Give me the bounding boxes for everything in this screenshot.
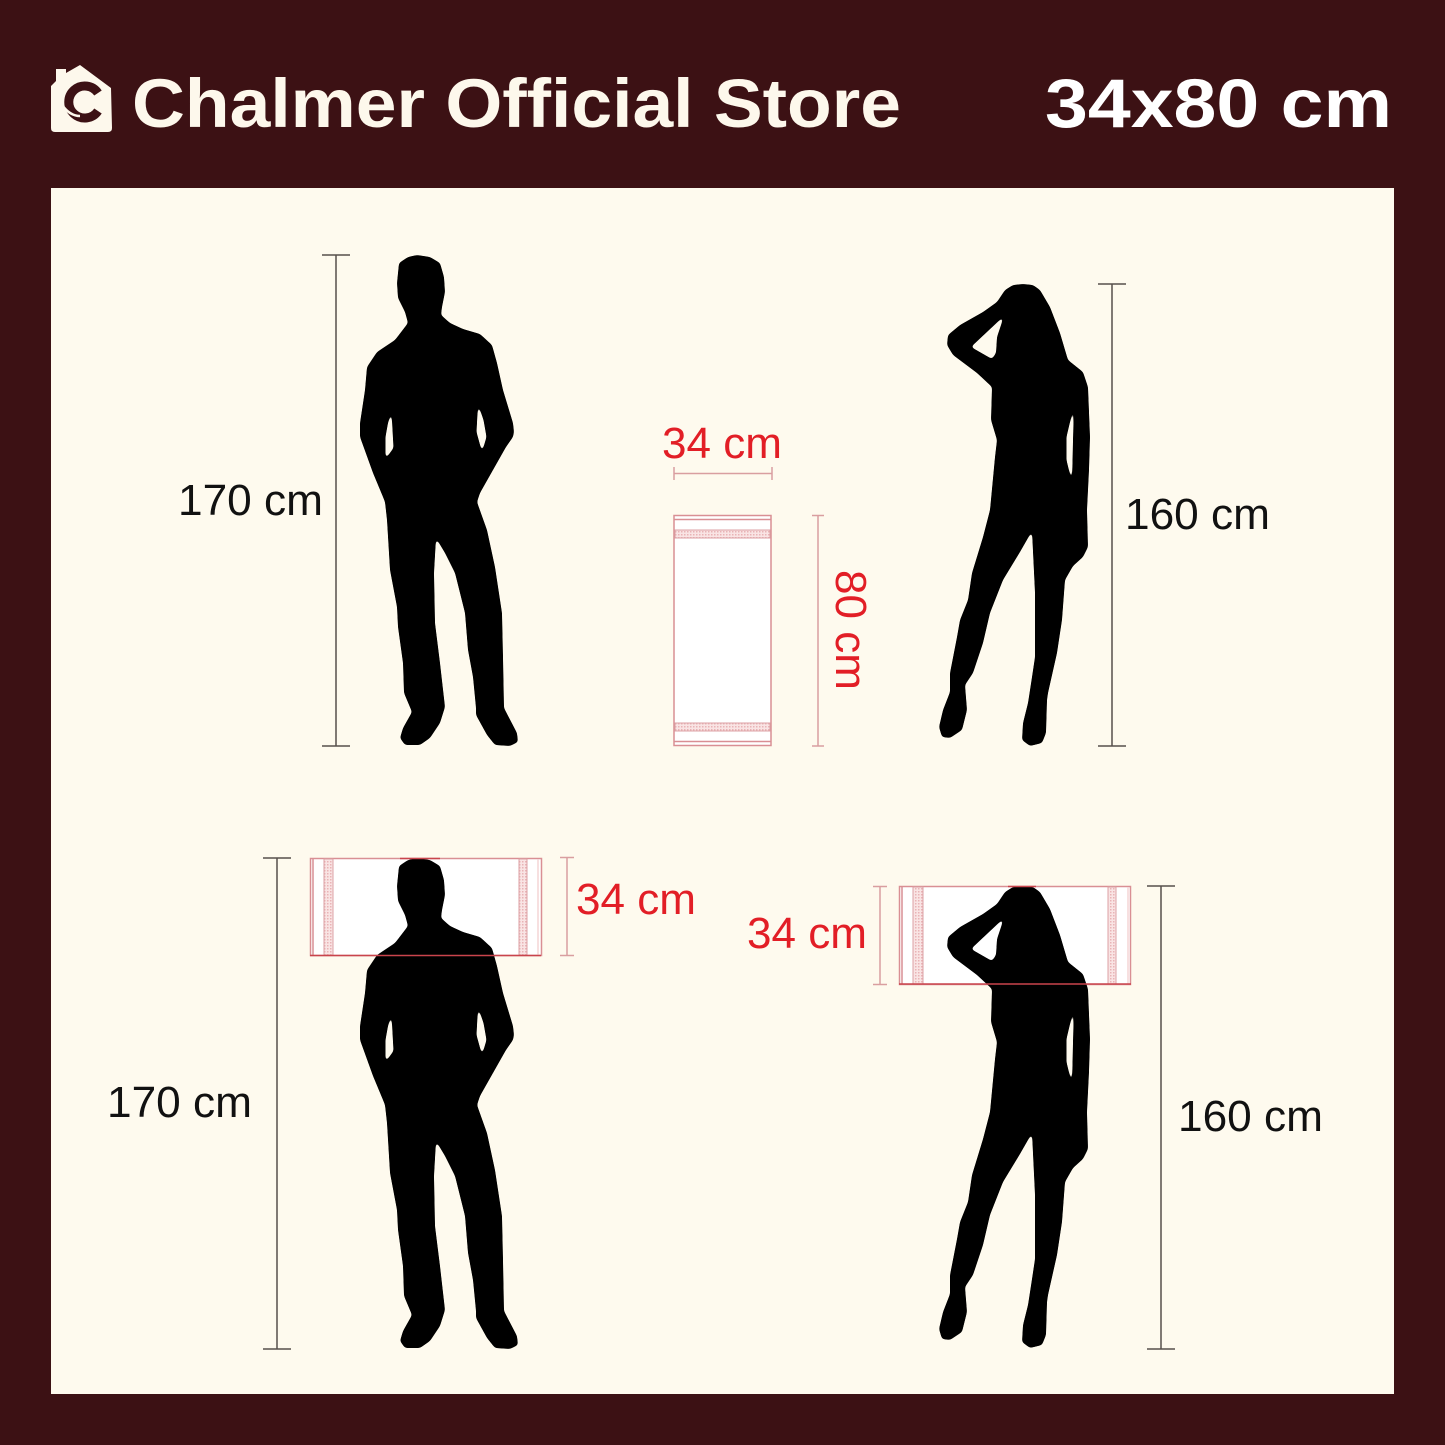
towel: held behind man — [310, 858, 542, 956]
label: towel height 80 cm: 80 cm — [826, 570, 875, 690]
icon: Chalmer house logo — [51, 65, 112, 132]
dimension line: towel width — [674, 467, 772, 480]
dimension line: towel width, woman — [873, 886, 887, 984]
towel: held behind woman — [900, 886, 1130, 984]
silhouette: man, top — [360, 255, 518, 746]
dimension line: woman height, bottom — [1147, 886, 1175, 1349]
dimension line: towel height — [812, 516, 824, 746]
silhouette: woman, top — [939, 284, 1090, 746]
dimension line: man height, top — [322, 255, 350, 746]
label: 170 cm, top: 170 cm — [178, 476, 323, 525]
silhouette: woman, bottom — [939, 886, 1090, 1348]
label: 34 cm, man: 34 cm — [576, 875, 696, 924]
towel edges over woman — [899, 886, 1131, 984]
label: 160 cm, bottom: 160 cm — [1178, 1092, 1323, 1141]
towel: upright — [674, 516, 771, 746]
label: 170 cm, bottom: 170 cm — [107, 1078, 252, 1127]
dimension line: man height, bottom — [263, 858, 291, 1349]
label: 160 cm, top: 160 cm — [1125, 490, 1270, 539]
panel: cream content area — [51, 188, 1394, 1394]
heading: towel size: 34x80 cm — [1045, 65, 1392, 142]
dimension line: woman height, top — [1098, 284, 1126, 746]
label: towel width 34 cm: 34 cm — [662, 419, 782, 468]
silhouette: man, bottom — [360, 858, 518, 1349]
dimension line: towel width, man — [560, 858, 574, 956]
towel edges over man — [310, 858, 541, 956]
title: store name: Chalmer Official Store — [132, 65, 901, 142]
label: 34 cm, woman: 34 cm — [747, 909, 867, 958]
